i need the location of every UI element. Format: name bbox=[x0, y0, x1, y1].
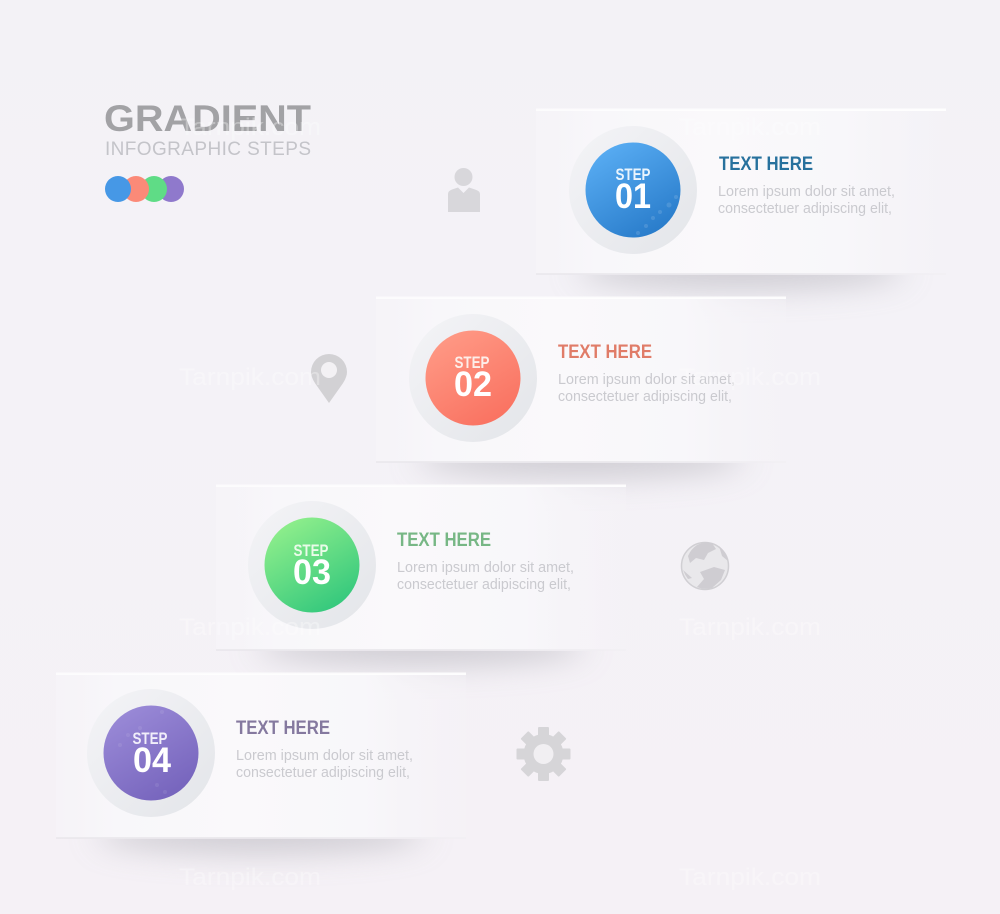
title: GRADIENT bbox=[104, 98, 311, 139]
watermarks bbox=[179, 114, 821, 891]
text block: step 4: Lorem ipsum dolor sit amet, bbox=[236, 748, 413, 764]
watermarks: Tarnpik.com bbox=[679, 864, 821, 891]
text block: step 2: Lorem ipsum dolor sit amet, bbox=[558, 372, 735, 388]
text block: step 1: Lorem ipsum dolor sit amet, bbox=[718, 184, 895, 200]
icon: person bbox=[448, 168, 480, 212]
badge: step 02 bbox=[409, 314, 537, 442]
badge: step 01: STEP bbox=[616, 166, 650, 184]
badge: step 01: 01 bbox=[615, 177, 651, 216]
panel: step 1 bbox=[536, 108, 946, 288]
watermarks: Tarnpik.com bbox=[179, 364, 321, 391]
heading: step 4: TEXT HERE bbox=[236, 717, 330, 739]
icon: map pin bbox=[311, 354, 347, 403]
watermarks: Tarnpik.com bbox=[679, 114, 821, 141]
badge: step 03: 03 bbox=[293, 553, 331, 592]
heading: step 2: TEXT HERE bbox=[558, 341, 652, 363]
heading: step 3: TEXT HERE bbox=[397, 529, 491, 551]
heading: step 1: TEXT HERE bbox=[719, 153, 813, 175]
badge: step 02: STEP bbox=[454, 354, 490, 372]
icon: globe bbox=[682, 542, 728, 590]
text block: step 3: Lorem ipsum dolor sit amet, bbox=[397, 560, 574, 576]
watermarks: Tarnpik.com bbox=[179, 114, 321, 141]
panel: step 4 bbox=[56, 672, 466, 852]
badge: step 02: 02 bbox=[454, 365, 492, 404]
badge: step 01 bbox=[569, 126, 697, 254]
text block: step 3: consectetuer adipiscing elit, bbox=[397, 577, 571, 593]
watermarks: Tarnpik.com bbox=[679, 364, 821, 391]
title: INFOGRAPHIC STEPS bbox=[105, 139, 311, 160]
panel: step 2 bbox=[376, 296, 786, 476]
colour dots bbox=[105, 176, 184, 202]
panel: step 3 bbox=[216, 484, 626, 664]
watermarks: Tarnpik.com bbox=[179, 614, 321, 641]
badge: step 03: STEP bbox=[294, 542, 328, 560]
title bbox=[104, 98, 311, 160]
text block: step 2: consectetuer adipiscing elit, bbox=[558, 389, 732, 405]
badge: step 04: STEP bbox=[132, 730, 168, 748]
badge: step 03 bbox=[248, 501, 376, 629]
watermarks: Tarnpik.com bbox=[679, 614, 821, 641]
badge: step 04 bbox=[87, 689, 215, 817]
icon: gear bbox=[516, 727, 570, 781]
badge: step 04: 04 bbox=[133, 741, 172, 780]
text block: step 1: consectetuer adipiscing elit, bbox=[718, 201, 892, 217]
watermarks: Tarnpik.com bbox=[179, 864, 321, 891]
text block: step 4: consectetuer adipiscing elit, bbox=[236, 765, 410, 781]
